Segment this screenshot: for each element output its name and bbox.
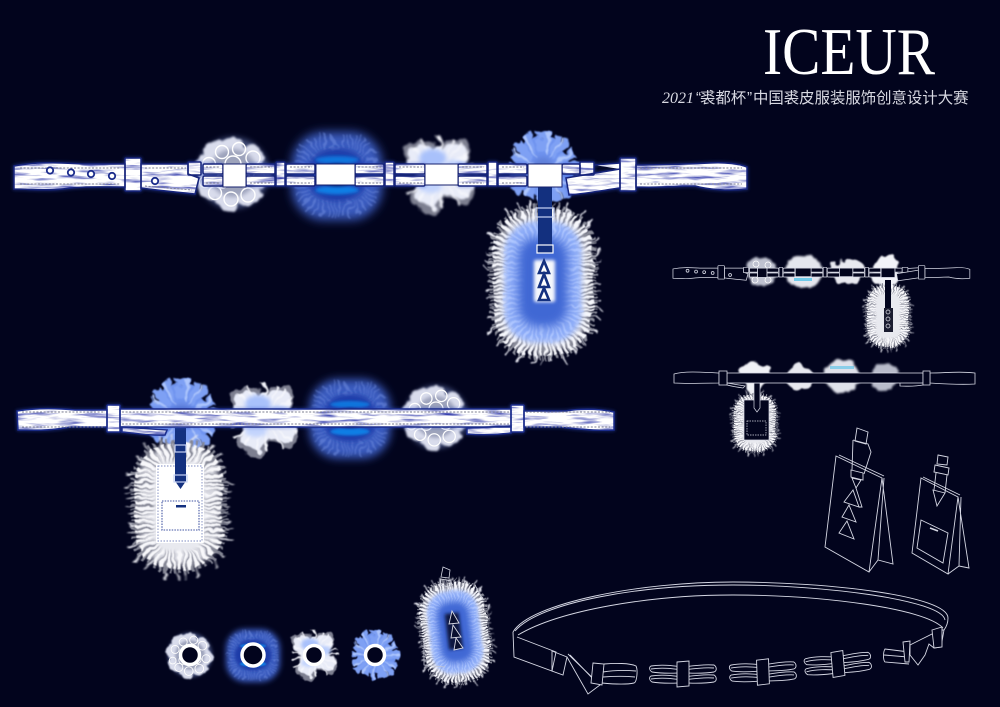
main belt two with fur flowers and pouch bbox=[17, 379, 614, 565]
swatch: white curl button bbox=[166, 633, 214, 679]
swatch: blue swirl button bbox=[226, 629, 280, 682]
white fur pouch bbox=[736, 396, 774, 450]
fur flower: blue swirl bbox=[292, 132, 382, 220]
fur flower: periwinkle bbox=[513, 138, 573, 198]
belt strap bbox=[17, 405, 614, 435]
dark pouch panel bbox=[744, 383, 769, 440]
fur flower: white curl bbox=[402, 385, 469, 450]
bag outline: triangles bbox=[825, 428, 893, 572]
pouch dark centre bbox=[445, 612, 463, 650]
fur flower: blue swirl bbox=[310, 379, 390, 458]
fur flower: periwinkle bbox=[152, 385, 212, 445]
belt straps bbox=[14, 158, 747, 195]
swatch: pale feather button bbox=[291, 632, 337, 681]
tilted fur pouch bbox=[420, 567, 490, 681]
subtitle: 中国裘皮服装服饰创意设计大赛 bbox=[753, 88, 968, 107]
white fur flowers bbox=[747, 255, 902, 289]
bag fold outline bbox=[424, 585, 483, 667]
outline belt bbox=[673, 266, 970, 281]
pouch triangles bbox=[449, 611, 463, 650]
pouch tab bbox=[440, 567, 451, 587]
title: ICEUR: ICEUR bbox=[763, 15, 935, 89]
fur pouch: white bbox=[139, 447, 219, 565]
subtitle: “ bbox=[696, 90, 701, 107]
strap cluster three bbox=[729, 658, 797, 686]
belt eyelets bbox=[47, 167, 158, 184]
subtitle: ” bbox=[747, 90, 752, 107]
main belt one with fur flowers and pouch bbox=[14, 132, 747, 349]
subtitle: 裘都杯 bbox=[700, 89, 747, 107]
belt perspective line drawing bbox=[513, 582, 948, 694]
subtitle: 2021 bbox=[662, 90, 694, 107]
strap cluster two bbox=[650, 661, 716, 687]
strap cluster four bbox=[804, 648, 872, 680]
pouch white panel bbox=[156, 428, 204, 543]
white fur pouch bbox=[869, 287, 907, 345]
bag outline: pocket bbox=[912, 455, 969, 574]
pouch strap and triangles bbox=[884, 280, 893, 332]
fur flower: pale feather bbox=[230, 386, 298, 458]
fur flower: white curl bbox=[194, 137, 271, 211]
pouch hanging strap bbox=[534, 187, 555, 302]
strap cluster five, buckle and tip bbox=[884, 627, 944, 665]
white fur flowers bbox=[742, 359, 899, 393]
line drawing: belt one small bbox=[673, 255, 970, 345]
line drawing: belt two small bbox=[674, 359, 975, 450]
swatch: periwinkle button bbox=[355, 635, 395, 675]
outline belt bbox=[674, 371, 975, 388]
fur pouch: blue bbox=[498, 215, 588, 349]
fur flower: pale feather bbox=[403, 139, 475, 215]
